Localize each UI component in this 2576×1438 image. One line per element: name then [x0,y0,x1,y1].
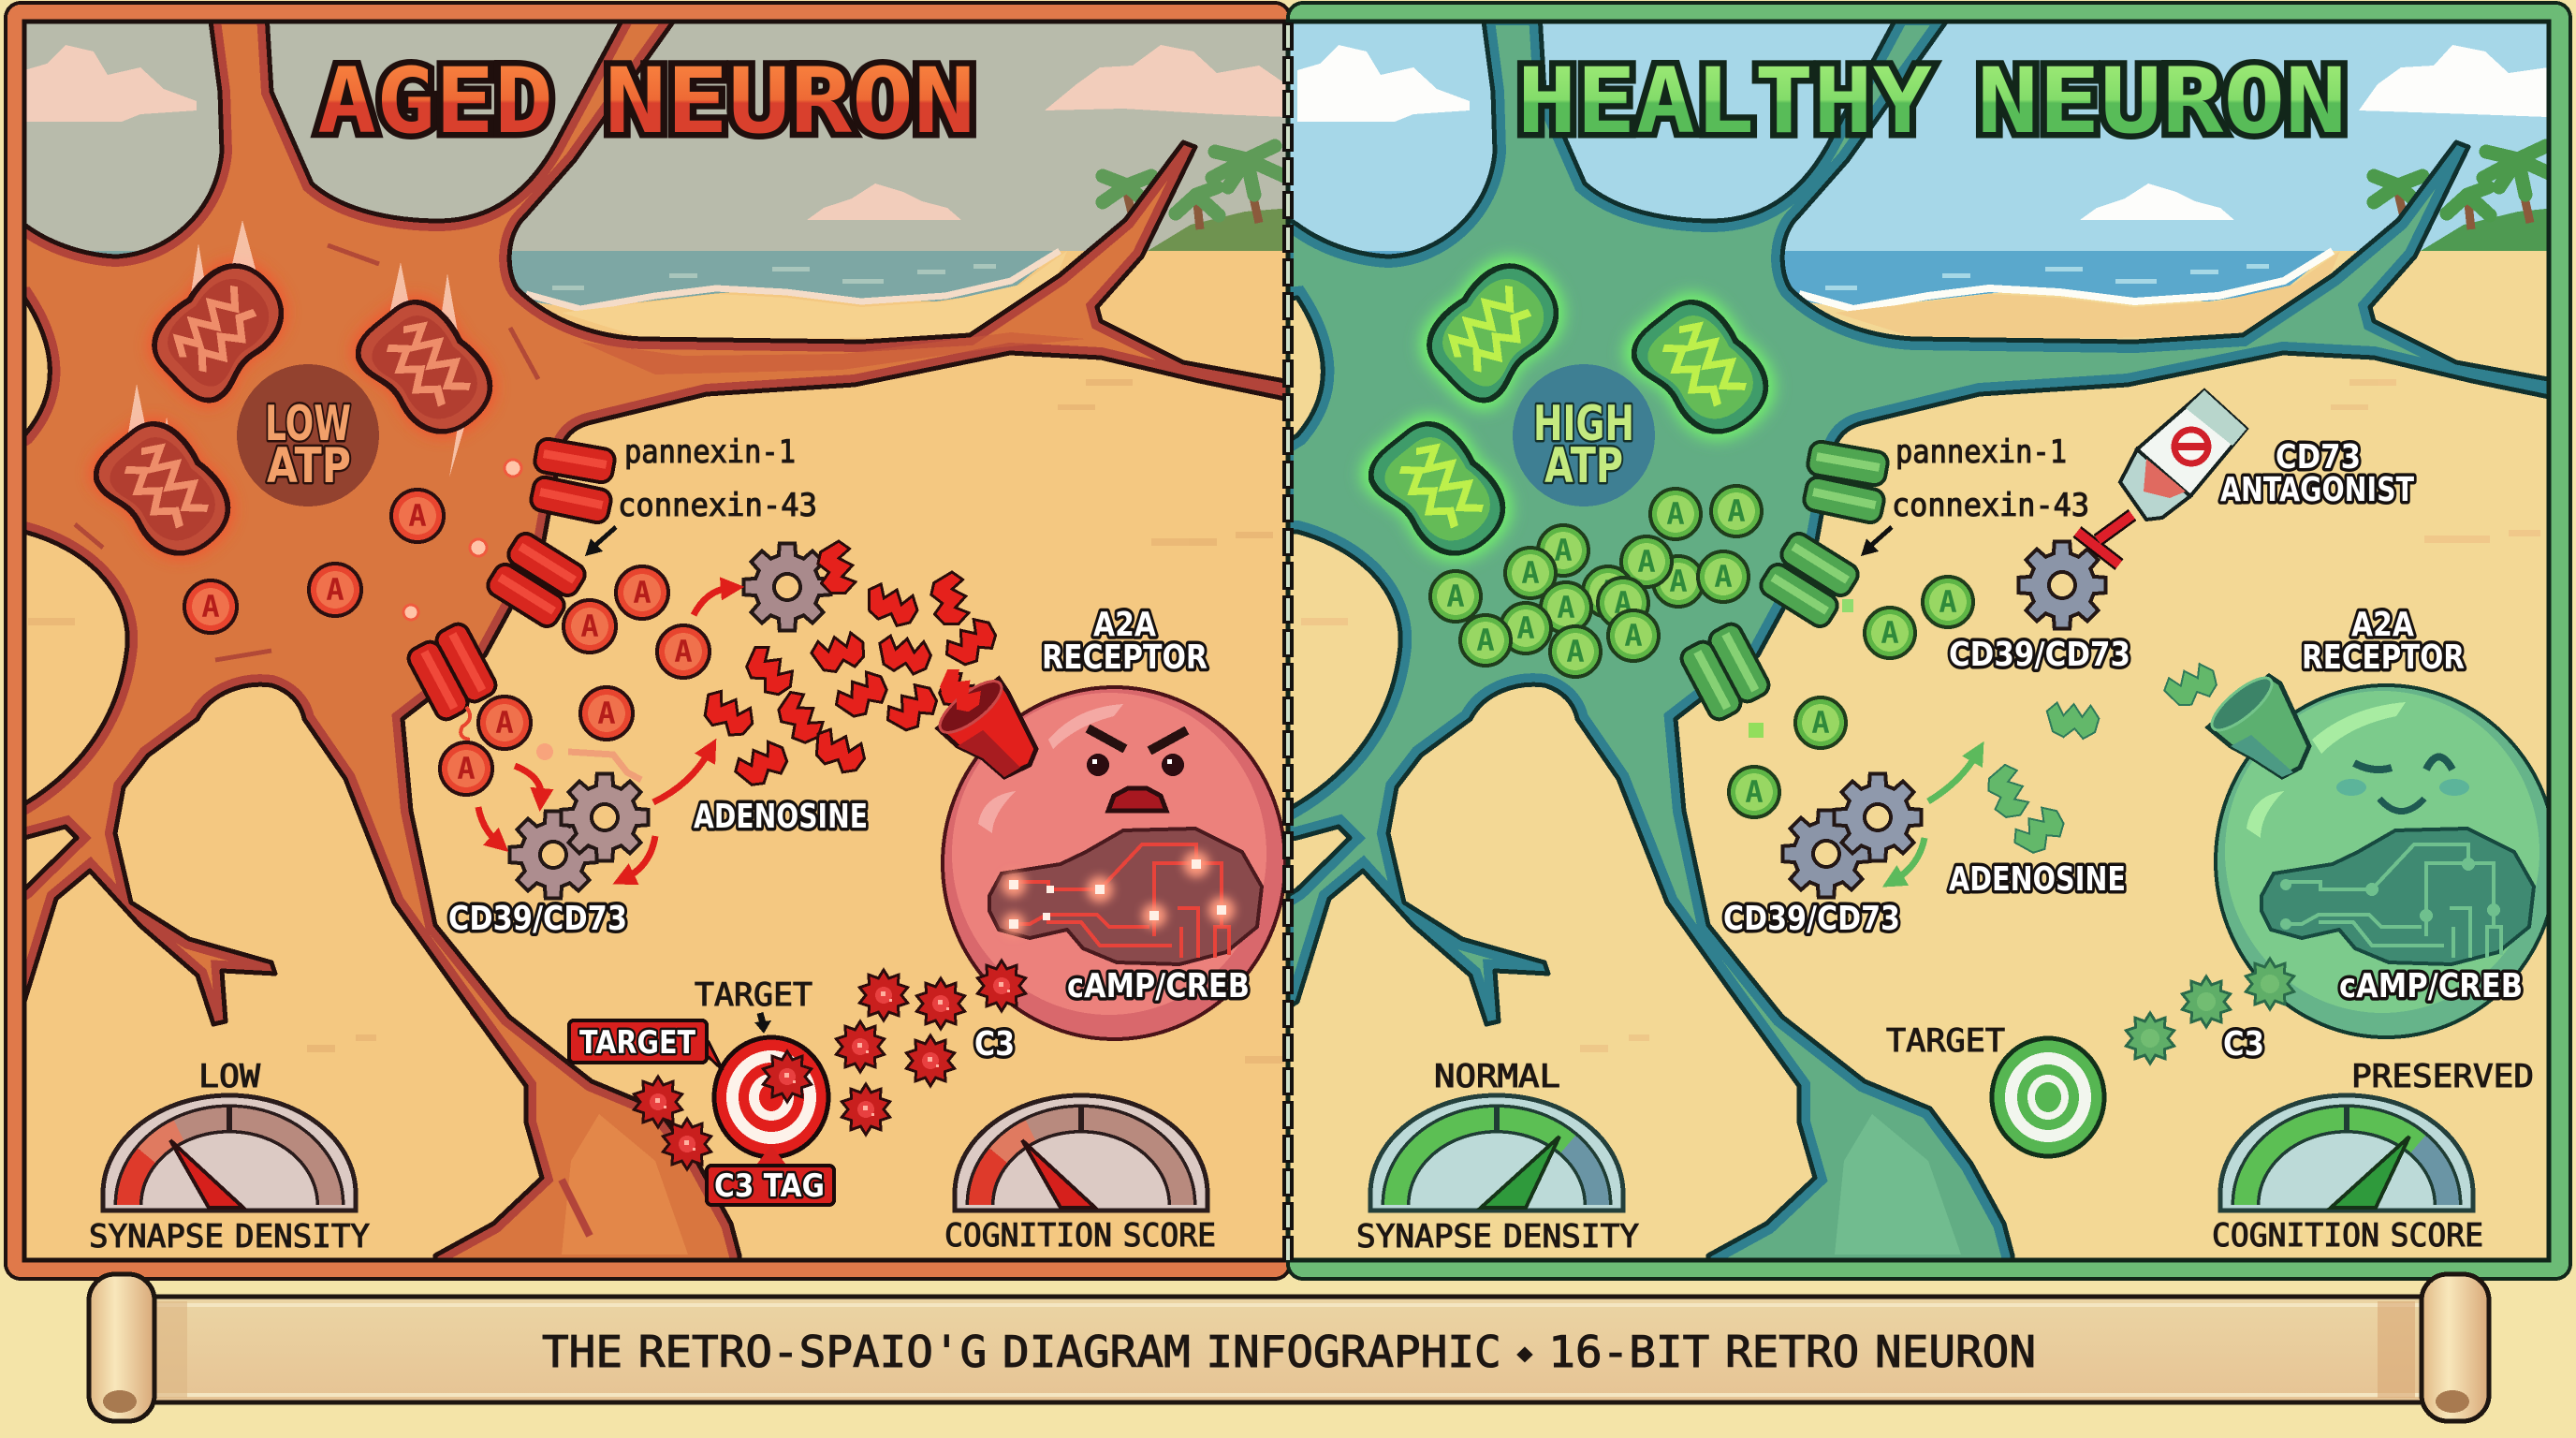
label: A2A receptor aged: A2A [1093,606,1156,644]
wet sand healthy [1835,251,2340,339]
label: A2A receptor aged: RECEPTOR [1042,638,1208,677]
ATP molecules: healthy: A [1446,579,1465,614]
island and palms healthy [2374,146,2555,251]
circuit nucleus: cAMP/CREB healthy [2261,829,2534,964]
vial: CD73 antagonist [2120,390,2247,520]
label: C3 healthy: C3 [2223,1025,2264,1064]
wave highlights healthy [1825,264,2269,290]
target: aged bullseye [714,1037,828,1157]
island and palms [1103,146,1292,251]
ATP molecules: healthy: A [1939,584,1957,620]
gears: CD39/CD73 healthy [1783,542,2105,897]
title: healthy neuron: NEURON [1977,49,2347,154]
label: C3 aged: C3 [974,1025,1015,1064]
ATP molecules: healthy: A [1881,615,1899,651]
ATP molecules: healthy [1430,486,1973,817]
ATP molecules: healthy: A [1714,559,1733,594]
gauge: synapse density aged: SYNAPSE DENSITY [89,1218,370,1255]
adenosine fragments: healthy [1983,660,2222,861]
gauge: cognition score aged [944,1095,1216,1255]
tag: target callout [569,1020,723,1070]
ATP molecules: healthy: A [1637,544,1656,580]
title: aged neuron: AGED [317,49,553,154]
title: healthy neuron: HEALTHY [1517,49,1932,154]
ATP molecules: aged: A [580,609,599,644]
face: happy [2336,756,2469,811]
gauge: synapse density aged [89,1058,370,1255]
arrow: connexin pointer healthy [1861,527,1892,556]
ATP molecules: healthy: A [1811,705,1830,741]
sand ripples [28,379,1284,1064]
sea healthy [1365,251,2325,305]
title: healthy neuron [1517,49,2347,154]
wet sand [562,251,1067,339]
frame: aged panel border [6,3,1290,1279]
scroll caption: THE RETRO-SPAIO'G DIAGRAM INFOGRAPHIC ⬩ 16-BIT RETRO NEURON [542,1327,2036,1377]
tag: target callout: TARGET [579,1024,696,1062]
gauge: synapse density healthy: NORMAL [1434,1058,1560,1095]
title: aged neuron [317,49,975,154]
label: CD39/CD73 aged: CD39/CD73 [448,900,627,938]
label: pannexin-1: pannexin-1 [624,433,796,471]
panel: aged neuron [9,14,1306,1269]
arrows: aged conversion [476,577,744,885]
circuit nucleus: cAMP/CREB [989,829,1262,964]
wave highlights [552,264,996,290]
high ATP nucleus: HIGH [1533,396,1634,452]
label: CD39/CD73 upper gear: CD39/CD73 [1949,636,2130,674]
ATP molecules: aged: A [495,705,514,741]
label: adenosine aged: ADENOSINE [694,798,868,836]
panel outlines [24,22,1288,1260]
tag: C3 tag callout: C3 TAG [714,1167,825,1205]
label: CD73 antagonist [2220,438,2414,509]
ATP molecules: aged: A [633,575,651,610]
clouds right [1297,45,2548,220]
face: angry [1087,728,1187,811]
gauge: cognition score healthy: PRESERVED [2351,1058,2534,1095]
tag: C3 tag callout [707,1145,834,1205]
label: A2A receptor healthy [2302,606,2465,677]
arrows: healthy conversion [1895,754,1977,880]
receptor funnel: aged [932,664,1036,777]
mitochondria: healthy [1350,239,1793,584]
C3 complement particles: aged [634,961,1026,1169]
ATP molecules: aged: A [326,572,344,608]
label: cAMP/CREB healthy: cAMP/CREB [2339,967,2523,1005]
label: target healthy: TARGET [1886,1022,2005,1060]
label: pannexin-1 healthy: pannexin-1 [1895,433,2067,471]
mitochondria: aged [80,220,513,580]
low ATP nucleus: ATP [267,438,351,494]
label: connexin-43 healthy: connexin-43 [1892,487,2089,524]
cell: happy A2A neuron body [2216,685,2556,1037]
ATP molecules: healthy: A [1557,590,1575,625]
channels: healthy [1677,440,1889,738]
ATP molecules: healthy: A [1599,574,1617,609]
ATP molecules: healthy: A [1666,496,1685,532]
gauge: synapse density healthy: SYNAPSE DENSITY [1356,1218,1639,1255]
ATP molecules: healthy: A [1566,634,1585,669]
ATP molecules: aged: A [674,634,693,669]
label: A2A receptor healthy: RECEPTOR [2302,638,2465,677]
neuron: aged [9,14,1306,1269]
sea [92,251,1053,305]
ATP molecules: aged: A [457,751,476,786]
label: A2A receptor healthy: A2A [2351,606,2414,644]
panel outline healthy [1288,22,2549,1260]
inhibitor bar [2077,515,2132,565]
ATP molecules: aged: A [201,589,220,624]
sand ripples healthy [1301,379,2540,1052]
channels: aged [403,437,641,780]
gears: CD39/CD73 aged [510,544,830,898]
shoreline foam healthy [1799,251,2333,309]
neuron: healthy [1282,14,2576,1269]
shoreline foam [526,251,1060,309]
scroll roller right [2422,1274,2489,1421]
ATP molecules: healthy: A [1624,618,1643,653]
gauge: cognition score aged: COGNITION SCORE [944,1217,1216,1255]
scroll roller left [89,1274,154,1421]
arrow: connexin pointer [585,527,616,556]
ATP molecules: healthy: A [1745,774,1764,810]
ATP molecules: aged: A [408,498,427,534]
target: healthy bullseye [1992,1038,2104,1156]
scroll banner [89,1274,2489,1421]
ATP molecules: healthy: A [1669,564,1688,599]
cell: angry A2A neuron body [943,687,1285,1039]
low ATP nucleus [237,364,379,506]
receptor funnel: healthy [2204,670,2309,777]
arrow: target pointer [754,1013,771,1034]
label: cAMP/CREB aged: cAMP/CREB [1067,967,1250,1005]
label: CD73 antagonist: CD73 [2276,438,2361,477]
ATP molecules: healthy: A [1554,533,1573,568]
label: target: TARGET [695,976,812,1014]
ATP molecules: healthy: A [1521,555,1540,591]
center dashed divider [1282,22,1294,1260]
ATP molecules: aged: A [597,696,616,731]
gauge: synapse density healthy [1356,1058,1639,1255]
label: CD39/CD73 healthy: CD39/CD73 [1723,900,1900,938]
C3 complement particles: healthy [2126,959,2294,1064]
gauge: cognition score healthy: COGNITION SCORE [2212,1217,2483,1255]
high ATP nucleus: ATP [1544,438,1623,494]
label: adenosine healthy: ADENOSINE [1949,860,2126,899]
clouds left [24,45,1286,220]
ATP molecules: healthy: A [1516,610,1535,646]
panel: healthy neuron [1282,14,2576,1269]
ATP molecules: healthy: A [1727,493,1746,529]
ATP molecules: healthy: A [1476,623,1495,658]
gauge: cognition score healthy [2212,1058,2534,1255]
label: A2A receptor aged [1042,606,1208,677]
title: aged neuron: NEURON [605,49,975,154]
high ATP nucleus [1513,364,1655,506]
ATP molecules: healthy: A [1614,585,1632,621]
low ATP nucleus: LOW [265,396,351,452]
gauge: synapse density aged: LOW [198,1058,261,1095]
ATP molecules: aged [184,490,710,795]
adenosine fragments: aged [704,539,997,786]
frame: healthy panel border [1288,3,2570,1279]
label: CD73 antagonist: ANTAGONIST [2220,471,2414,509]
label: connexin-43: connexin-43 [618,487,817,524]
